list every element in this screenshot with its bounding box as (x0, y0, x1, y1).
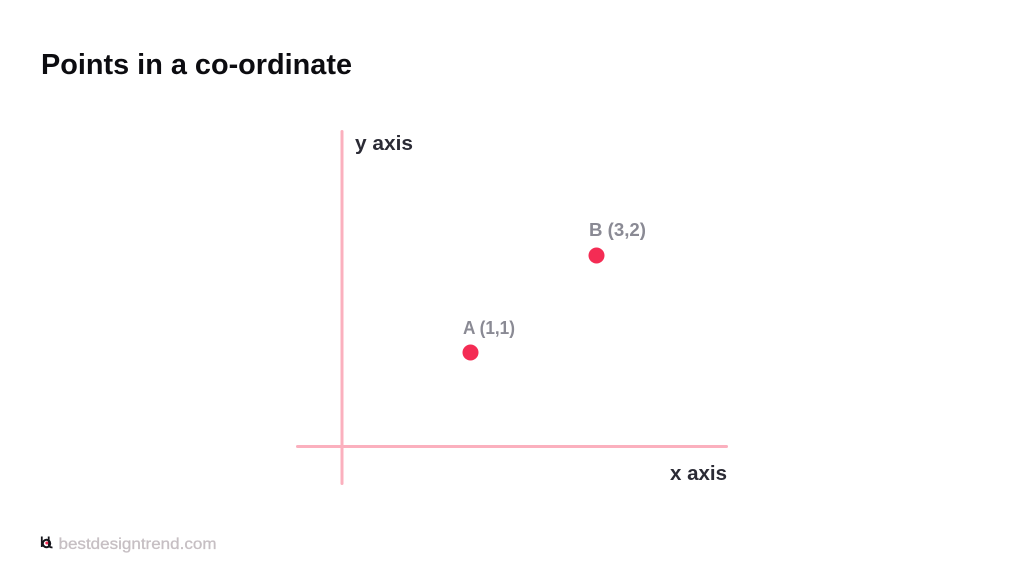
point A label: A (1,1) (463, 318, 515, 338)
y axis line (340, 130, 344, 485)
point B (588, 248, 604, 264)
x axis line (296, 445, 728, 448)
title: Points in a co-ordinate (41, 49, 352, 81)
brand text: bestdesigntrend.com (58, 536, 216, 553)
point B label: B (3,2) (589, 220, 646, 240)
icon: brand logo (42, 536, 52, 548)
y axis label: y axis (355, 132, 413, 155)
point A (462, 344, 478, 360)
x axis label: x axis (670, 462, 727, 485)
chart: coordinate plane (296, 130, 728, 485)
footer brand (42, 536, 216, 553)
